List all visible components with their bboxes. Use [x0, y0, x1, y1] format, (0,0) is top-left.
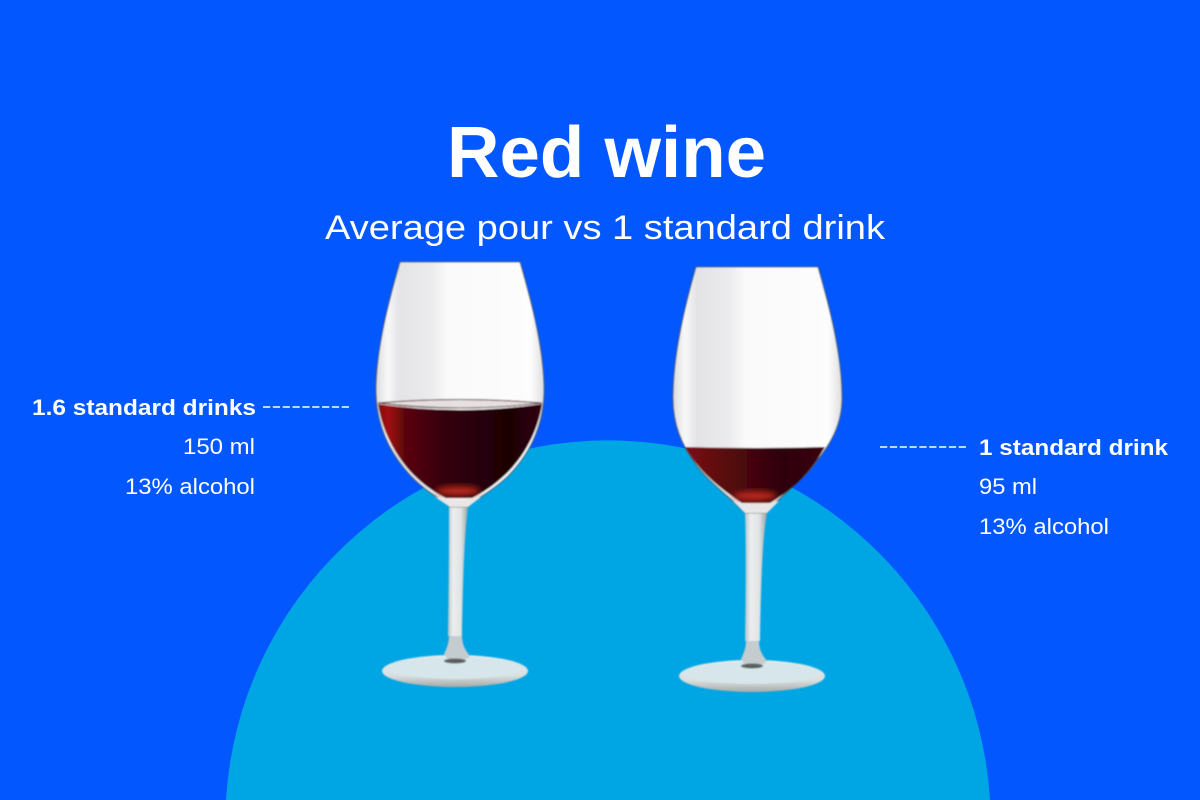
title: Red wine: [447, 113, 766, 193]
glass: one standard drink: [673, 267, 842, 692]
callout: average pour: 150 ml: [183, 434, 255, 459]
wine in right glass: [685, 447, 825, 503]
callout: one standard drink: 1 standard drink: [979, 435, 1169, 460]
stem of left glass: [448, 507, 468, 636]
base sliver of right bowl: [733, 501, 779, 513]
light blue semicircle: [226, 440, 990, 800]
stem of right glass: [745, 513, 767, 641]
callout: one standard drink: [880, 435, 1169, 539]
callout: one standard drink: 13% alcohol: [979, 514, 1109, 539]
callout: average pour: 1.6 standard drinks: [32, 395, 256, 420]
wine surface of left glass: [378, 400, 542, 408]
callout: average pour: 13% alcohol: [125, 474, 255, 499]
bottom glow of right wine: [733, 491, 777, 501]
callout: average pour: [32, 395, 349, 499]
glass: average pour: [376, 262, 544, 687]
foot of left glass: [382, 636, 528, 687]
bottom glow of left wine: [436, 486, 480, 496]
subtitle: Average pour vs 1 standard drink: [325, 209, 886, 247]
wine in left glass: [378, 404, 542, 498]
base sliver of left bowl: [435, 497, 481, 507]
foot of right glass: [679, 641, 825, 692]
callout: one standard drink: 95 ml: [979, 474, 1037, 499]
bowl of right glass: [673, 267, 842, 513]
bowl of left glass: [376, 262, 544, 507]
